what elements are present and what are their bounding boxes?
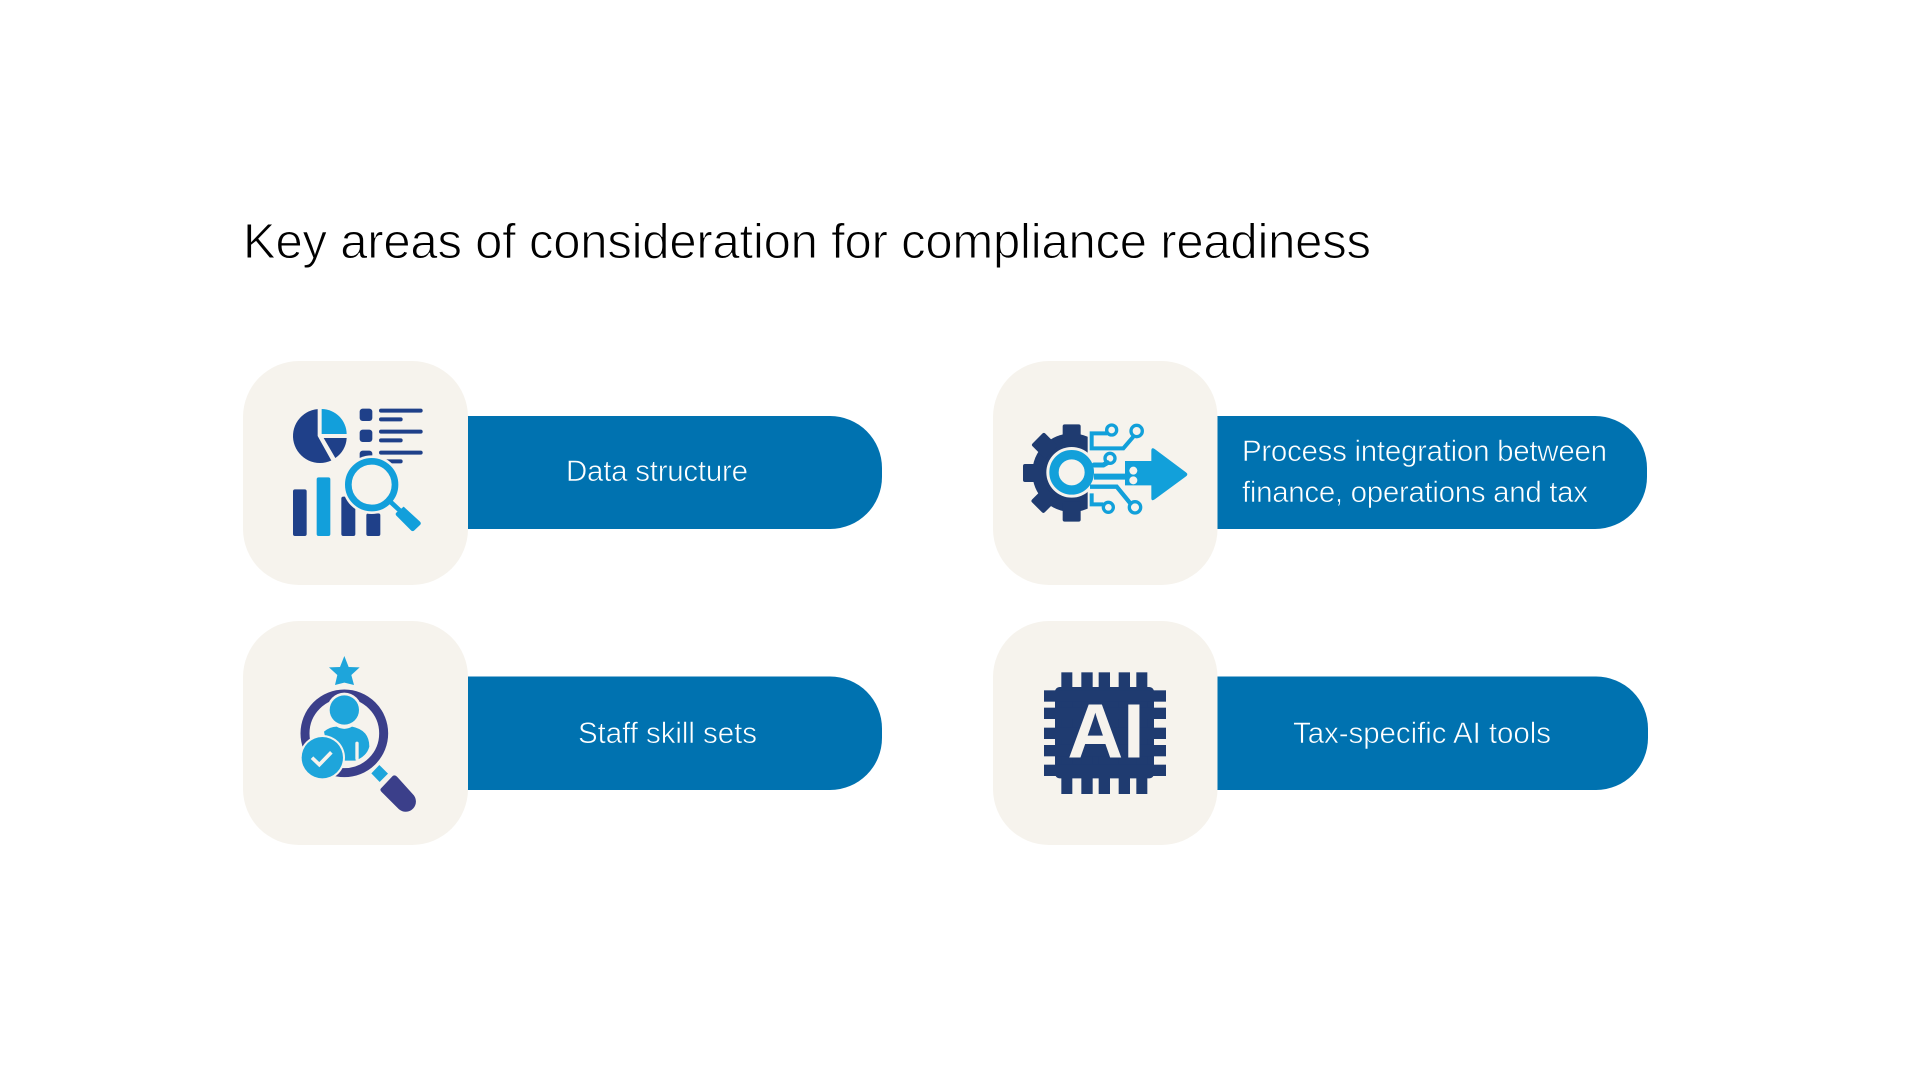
panel: data structure <box>243 361 882 585</box>
label: staff skill sets: Staff skill sets <box>578 717 757 750</box>
icon card: staff skill sets <box>243 621 468 845</box>
label: process integration: Process integration between <box>1242 435 1607 468</box>
panel: process integration <box>993 361 1647 585</box>
label pill: data structure <box>460 416 882 529</box>
label: data structure: Data structure <box>566 455 748 488</box>
icon card: process integration <box>993 361 1218 585</box>
panel: tax-specific AI tools <box>993 621 1648 845</box>
label pill: tax-specific AI tools <box>1210 676 1648 790</box>
icon card: tax-specific AI tools <box>993 621 1218 845</box>
label: tax-specific AI tools: Tax-specific AI tools <box>1293 717 1551 750</box>
label pill: process integration <box>1210 416 1647 529</box>
label pill: staff skill sets <box>460 676 882 790</box>
icon: AI chip: AI <box>1067 689 1145 775</box>
label: process integration <box>1242 435 1607 509</box>
icon: person in magnifier with star <box>300 656 416 812</box>
icon: gear with circuit arrow <box>1023 424 1187 522</box>
label: process integration: finance, operations and tax <box>1242 476 1588 509</box>
icon: charts and magnifier <box>293 409 423 536</box>
panel: staff skill sets <box>243 621 882 845</box>
icon: AI chip <box>1044 672 1166 794</box>
title: Key areas of consideration for compliance readiness <box>243 215 1371 269</box>
icon card: data structure <box>243 361 468 585</box>
